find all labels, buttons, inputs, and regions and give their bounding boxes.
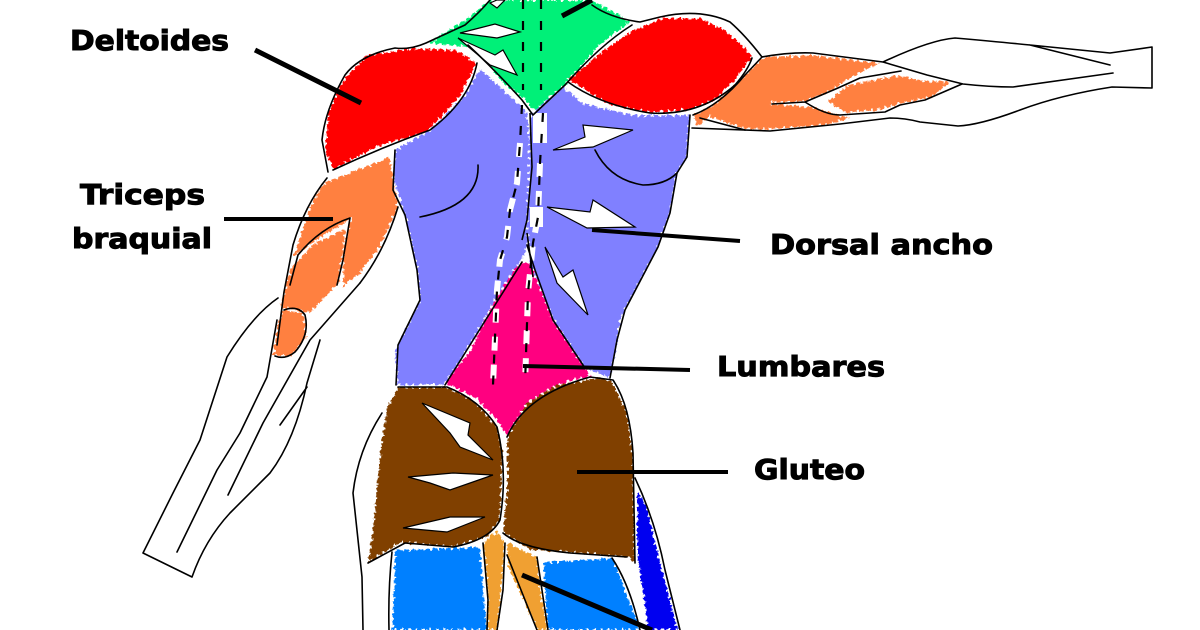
- muscle: left latissimus (periwinkle): [393, 68, 533, 385]
- spine dashes: [493, 0, 543, 385]
- muscle: right latissimus (periwinkle): [527, 87, 690, 378]
- arrow: lat right: [545, 247, 588, 315]
- muscle: right hamstring (blue): [543, 558, 638, 630]
- outline: torso sides: [393, 115, 690, 385]
- colored muscle regions: [273, 0, 950, 630]
- arrow: upper back right 2: [547, 200, 635, 228]
- arrow: gluteus 3: [403, 517, 485, 532]
- arrow: gluteus 1: [422, 403, 493, 460]
- label: Lumbares: Lumbares: [717, 350, 885, 383]
- leader: Deltoides: [255, 50, 361, 103]
- outline: chest creases: [420, 150, 677, 217]
- leader: Triceps braquial: [224, 217, 333, 221]
- leader: trapezius (cropped label): [562, 0, 592, 16]
- spine white gaps: [493, 143, 540, 385]
- outline: neck and shoulders: [322, 0, 762, 172]
- muscle: left triceps (orange): [293, 157, 398, 287]
- muscle: left triceps long head (orange): [280, 228, 346, 313]
- muscle: right deltoid (red): [568, 18, 752, 113]
- outline: left upper arm: [275, 178, 398, 357]
- spine centre line: [522, 113, 533, 277]
- white muscle-fibre arrows: [403, 0, 635, 532]
- muscle: adductor right (gold): [507, 542, 548, 630]
- muscle: left hamstring (blue): [392, 547, 487, 630]
- arrow: trapezius 2: [458, 38, 517, 75]
- label: Gluteo: Gluteo: [754, 453, 865, 486]
- muscle: left gluteus (brown): [368, 387, 503, 563]
- leader: Gluteo: [577, 470, 728, 474]
- label: Dorsal ancho: Dorsal ancho: [770, 228, 993, 261]
- muscle: adductor left (gold): [483, 530, 505, 630]
- leader: Lumbares: [523, 366, 690, 370]
- arrow: upper back right 1: [553, 125, 633, 150]
- outline: left forearm: [143, 283, 360, 577]
- outline: right arm upper: [692, 38, 1152, 131]
- leader: bottom muscle (cropped label): [522, 575, 652, 630]
- muscle: right gluteus (brown): [503, 377, 635, 563]
- muscle: outer thigh (deep blue): [637, 490, 678, 630]
- muscle: right triceps long head (orange): [827, 75, 950, 113]
- outline: gluteus: [368, 377, 635, 563]
- label line: braquial: braquial: [72, 222, 212, 255]
- muscle: left deltoid (red): [325, 48, 477, 170]
- label: Deltoides: Deltoides: [70, 24, 229, 57]
- outline: trapezius lower edge: [468, 25, 752, 115]
- outline: hip and legs: [353, 413, 680, 630]
- spine white patches: [530, 113, 547, 227]
- muscle: right triceps (orange): [693, 55, 880, 130]
- muscle: trapezius (green): [428, 0, 630, 113]
- outline: right arm inner: [693, 57, 962, 130]
- leader: Dorsal ancho: [592, 230, 740, 241]
- label line: Triceps: Triceps: [80, 178, 205, 211]
- muscle: lumbar (pink): [445, 262, 592, 437]
- arrow: gluteus 2: [408, 473, 493, 490]
- outline: body centre: [445, 245, 585, 385]
- arrow: trapezius 3: [490, 0, 505, 8]
- arrow: trapezius 1: [460, 24, 520, 38]
- spine with dashes: [493, 0, 547, 385]
- label: Triceps braquial: [72, 178, 212, 255]
- muscle: left elbow (orange): [273, 310, 307, 357]
